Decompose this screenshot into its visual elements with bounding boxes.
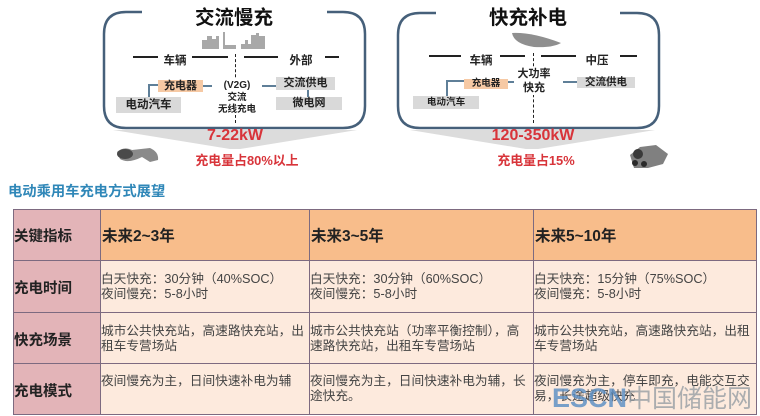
row: charging time: 充电时间	[14, 281, 72, 297]
row: charging time: 白天快充：30分钟（60%SOC）	[310, 272, 491, 286]
rounded frame	[396, 12, 660, 130]
medium voltage label: 中压	[586, 55, 608, 67]
row: header	[14, 210, 756, 260]
row: fast charging scenarios: 城市公共快充站，高速路快充站，出租	[534, 324, 750, 338]
row: fast charging scenarios: 城市公共快充站（功率平衡控制），高	[310, 324, 519, 338]
row: charging time: 白天快充：15分钟（75%SOC）	[534, 272, 715, 286]
center text: 大功率	[518, 68, 550, 80]
share text: 充电量占15%	[497, 153, 575, 168]
row: header: 未来5~10年	[535, 228, 616, 245]
row: fast charging scenarios: 车专营场站	[534, 339, 597, 353]
row: header: 关键指标	[14, 229, 72, 245]
table: charging outlook	[13, 209, 757, 415]
icon: road	[512, 32, 561, 48]
EV box: 电动汽车	[126, 99, 172, 111]
charger box	[464, 79, 508, 89]
row: charging time	[14, 261, 715, 312]
center text: 无线充电	[218, 104, 256, 114]
AC supply box: 交流供电	[585, 76, 627, 88]
center text	[515, 68, 553, 95]
AC supply box	[276, 77, 335, 90]
vehicle label: 车辆	[164, 55, 186, 67]
AC supply box: 交流供电	[284, 77, 328, 89]
row: charging mode	[14, 364, 750, 414]
icon: AC plug	[117, 148, 158, 162]
heading: 交流慢充	[195, 7, 273, 29]
row: header: 未来3~5年	[311, 228, 384, 245]
row: fast charging scenarios	[14, 313, 750, 363]
center text: 交流	[227, 92, 246, 103]
AC supply box	[577, 77, 635, 88]
center text	[215, 79, 259, 115]
power value: 7-22kW	[207, 127, 263, 144]
row: charging time: 夜间慢充：5-8小时	[534, 287, 641, 301]
share text: 充电量占80%以上	[195, 153, 299, 168]
microgrid box	[276, 97, 342, 110]
EV box	[116, 97, 181, 113]
row: charging time: 夜间慢充：5-8小时	[101, 287, 208, 301]
row: charging mode: 夜间慢充为主，日间快速补电为辅	[101, 374, 291, 388]
power value: 120-350kW	[492, 127, 574, 144]
microgrid box: 微电网	[292, 97, 326, 109]
row: fast charging scenarios: 城市公共快充站，高速路快充站，出	[101, 324, 304, 338]
panel: AC slow charging	[102, 7, 366, 168]
heading: 快充补电	[489, 7, 567, 29]
center text: 快充	[523, 82, 545, 94]
icon: city skyline	[202, 32, 265, 49]
row: charging mode: 易，长途超级快充	[534, 389, 636, 403]
row: charging mode: 夜间慢充为主，停车即充，电能交互交	[534, 374, 750, 388]
row: fast charging scenarios: 租车专营场站	[101, 339, 177, 353]
charger box: 充电器	[472, 78, 500, 89]
panel: DC fast charging	[396, 7, 668, 168]
row: charging mode: 途快充。	[310, 389, 361, 403]
row: charging mode: 夜间慢充为主，日间快速补电为辅，长	[310, 374, 526, 388]
row: header: 未来2~3年	[102, 228, 175, 245]
rounded frame	[102, 10, 366, 130]
vehicle label: 车辆	[470, 55, 492, 67]
funnel shadow	[114, 130, 356, 149]
row: charging time: 夜间慢充：5-8小时	[310, 287, 417, 301]
icon: DC plug	[630, 145, 668, 168]
EV box	[413, 96, 479, 109]
section heading: 电动乘用车充电方式展望	[8, 184, 165, 200]
center dashed divider	[533, 53, 534, 123]
funnel shadow	[410, 130, 654, 149]
row: fast charging scenarios: 速路快充站，出租车专营场站	[310, 339, 475, 353]
watermark: ESCN中国储能网	[552, 383, 752, 413]
row: charging mode: 充电模式	[14, 384, 72, 400]
EV box: 电动汽车	[427, 97, 465, 108]
row: fast charging scenarios: 快充场景	[14, 333, 72, 349]
center dashed divider	[235, 54, 236, 123]
charger box: 充电器	[164, 80, 197, 92]
external label: 外部	[290, 55, 312, 67]
row: charging time: 白天快充：30分钟（40%SOC）	[101, 272, 282, 286]
center text: (V2G)	[224, 80, 250, 91]
